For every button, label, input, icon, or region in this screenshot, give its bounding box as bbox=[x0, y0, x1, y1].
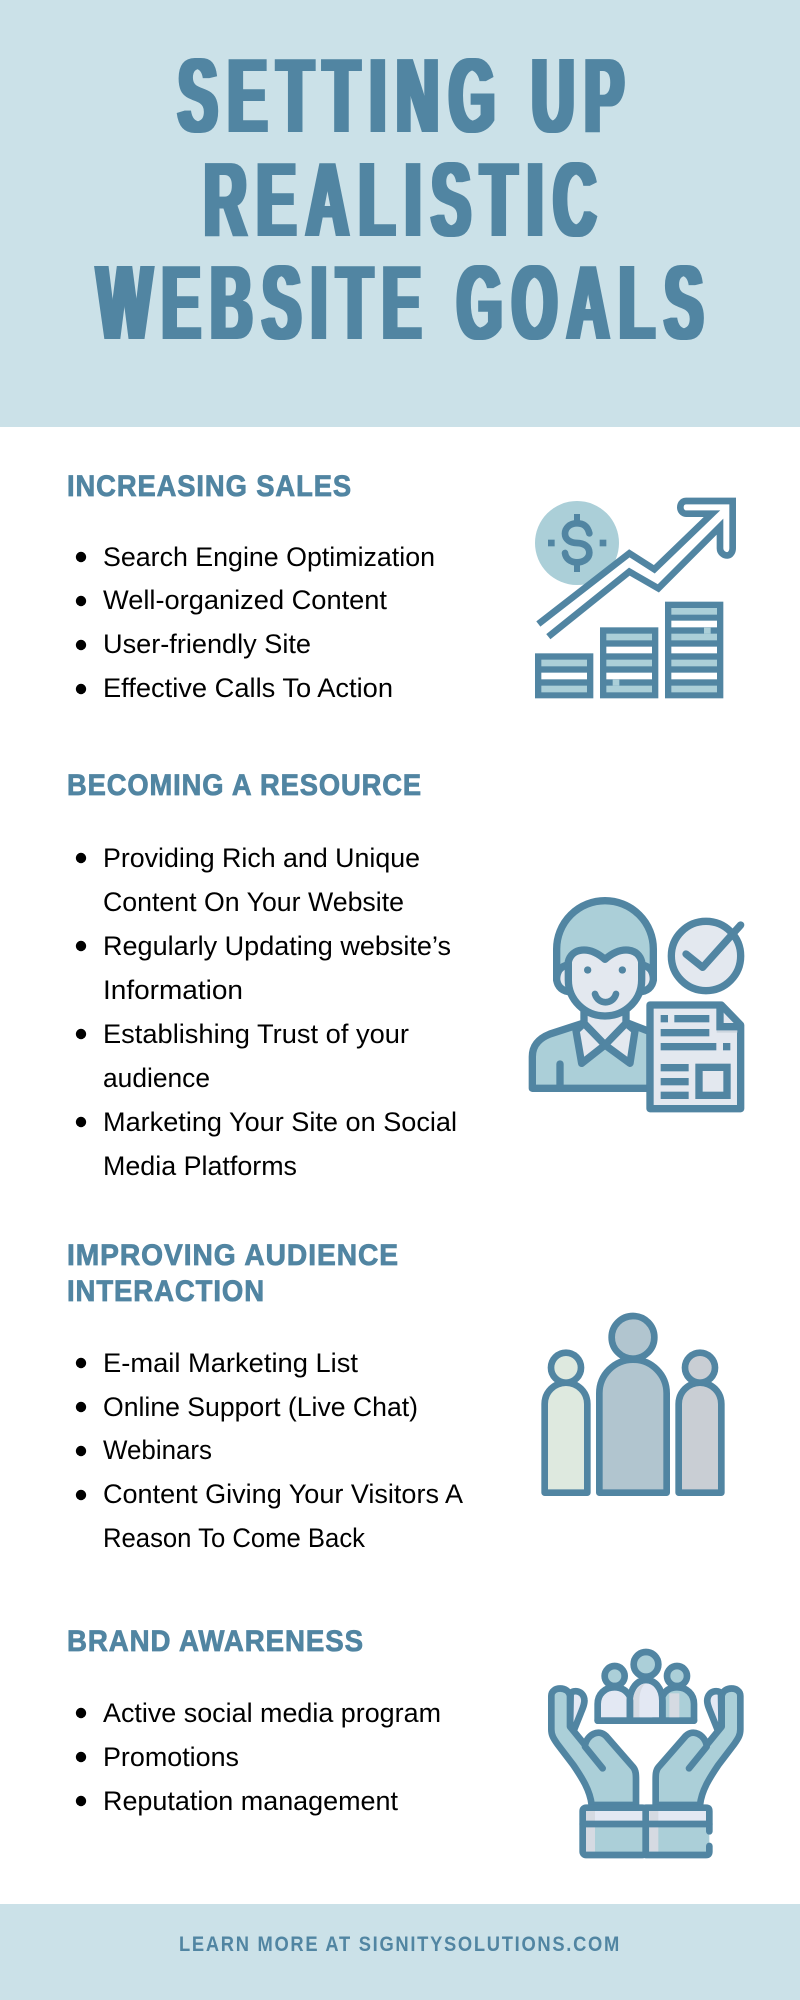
bullet list: becoming a resource: Marketing Your Site on Social bbox=[103, 1107, 457, 1137]
bullet list: becoming a resource: Information bbox=[103, 975, 243, 1005]
bullet list: becoming a resource: Establishing Trust of your bbox=[103, 1019, 409, 1049]
bullet list: brand awareness: Reputation management bbox=[103, 1786, 398, 1816]
panel: increasing sales bbox=[67, 470, 733, 703]
bullet list: becoming a resource: Regularly Updating website’s bbox=[103, 931, 451, 961]
right hand bbox=[656, 1688, 740, 1805]
header band bbox=[0, 0, 800, 427]
bullet list: improving audience interaction bbox=[76, 1348, 463, 1553]
heading: increasing sales: INCREASING SALES bbox=[67, 470, 352, 503]
panel: brand awareness bbox=[67, 1625, 740, 1855]
bullet list: becoming a resource: Media Platforms bbox=[103, 1151, 297, 1181]
cuffs bbox=[583, 1808, 646, 1855]
bullet list: increasing sales: User-friendly Site bbox=[103, 629, 311, 659]
bullet list: becoming a resource: Content On Your Website bbox=[103, 887, 404, 917]
bullet list: becoming a resource bbox=[76, 843, 457, 1181]
bullet list: improving audience interaction: Reason To Come Back bbox=[103, 1523, 365, 1553]
heading: becoming a resource: BECOMING A RESOURCE bbox=[67, 769, 422, 802]
bullet list: becoming a resource: Providing Rich and Unique bbox=[103, 843, 420, 873]
icon: rising sales chart with dollar coin bbox=[535, 501, 733, 698]
heading: improving audience interaction bbox=[67, 1239, 399, 1308]
bullet list: increasing sales: Search Engine Optimization bbox=[103, 542, 435, 572]
left hand bbox=[551, 1688, 636, 1805]
bullet list: increasing sales: Effective Calls To Action bbox=[103, 673, 393, 703]
bullet list: increasing sales bbox=[76, 542, 435, 703]
title bbox=[97, 37, 713, 362]
icon: three people silhouettes bbox=[545, 1316, 721, 1493]
bullet list: improving audience interaction: E-mail Marketing List bbox=[103, 1348, 358, 1378]
bullet list: becoming a resource: audience bbox=[103, 1063, 210, 1093]
bullet list: brand awareness: Promotions bbox=[103, 1742, 239, 1772]
footer call to action: LEARN MORE AT SIGNITYSOLUTIONS.COM bbox=[179, 1932, 621, 1956]
panel: becoming a resource bbox=[67, 769, 741, 1181]
bullet list: increasing sales: Well-organized Content bbox=[103, 585, 388, 615]
bars are drawn as stacked columns bbox=[535, 653, 593, 698]
icon: hands holding a group of people bbox=[551, 1652, 740, 1855]
panel: improving audience interaction bbox=[67, 1239, 721, 1553]
bullet list: improving audience interaction: Content Giving Your Visitors A bbox=[103, 1479, 463, 1509]
bullet list: improving audience interaction: Online Support (Live Chat) bbox=[103, 1392, 418, 1422]
footer band bbox=[0, 1904, 800, 2000]
heading: improving audience interaction: INTERACTION bbox=[67, 1275, 265, 1308]
bullet list: brand awareness: Active social media program bbox=[103, 1698, 441, 1728]
icon: person with checkmark and document bbox=[532, 901, 741, 1109]
heading: brand awareness: BRAND AWARENESS bbox=[67, 1625, 364, 1658]
bullet list: brand awareness bbox=[76, 1698, 441, 1816]
bullet list: improving audience interaction: Webinars bbox=[103, 1435, 212, 1465]
heading: improving audience interaction: IMPROVING AUDIENCE bbox=[67, 1239, 399, 1272]
